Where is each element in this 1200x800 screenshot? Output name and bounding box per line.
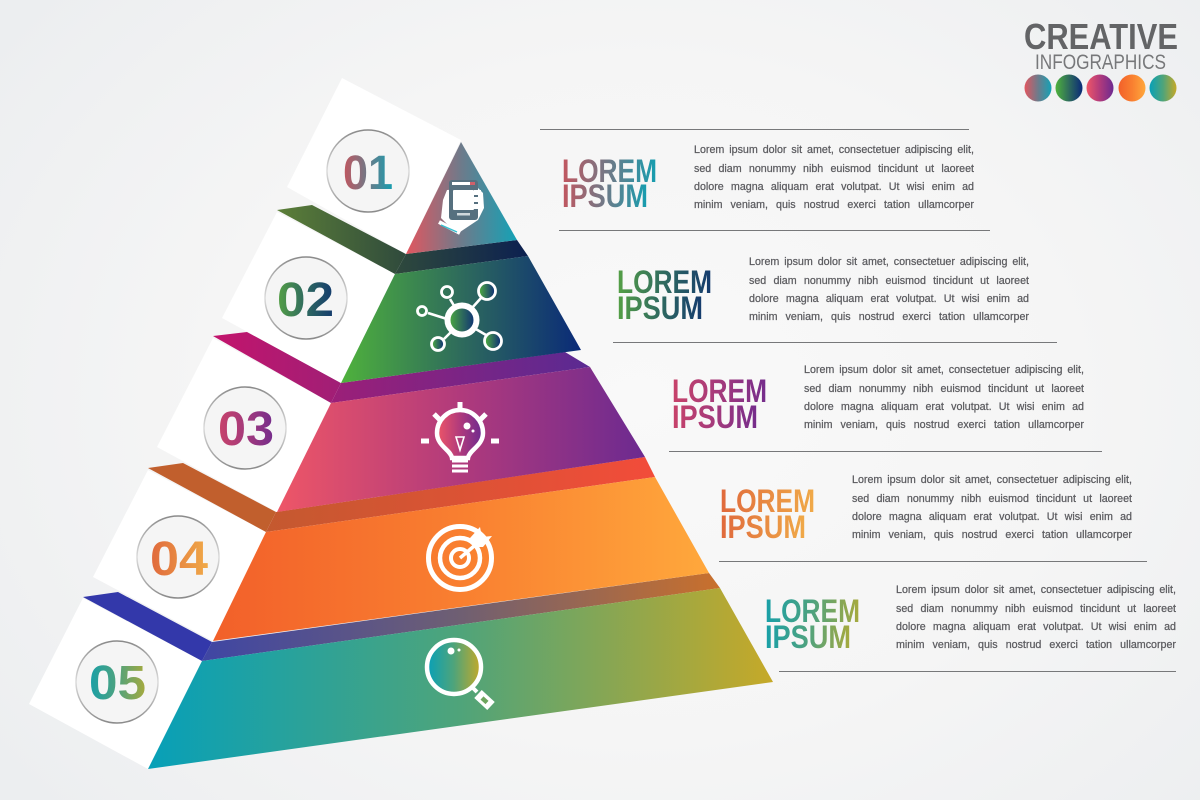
logo: Creative Infographics (1024, 16, 1178, 102)
heading 2: IPSUM (617, 290, 703, 326)
text block 3: dolore magna aliquam erat volutpat. Ut wisi enim ad (804, 401, 1084, 413)
text block 3: sed diam nonummy nibh euismod tincidunt ut laoreet (804, 383, 1084, 395)
text block 2: sed diam nonummy nibh euismod tincidunt ut laoreet (749, 275, 1029, 287)
text block 1: minim veniam, quis nostrud exerci tation ullamcorper (694, 199, 974, 211)
text block 2: minim veniam, quis nostrud exerci tation ullamcorper (749, 311, 1029, 323)
icon: hand holding phone (439, 180, 484, 233)
text block 4: Lorem ipsum dolor sit amet, consectetuer adipiscing elit, (852, 474, 1132, 486)
number badge 02: 02 (277, 274, 334, 327)
number badge 03: 03 (218, 403, 274, 456)
number badge 04: 04 (150, 533, 208, 586)
text block 1: Lorem ipsum dolor sit amet, consectetuer adipiscing elit, (694, 144, 974, 156)
text block 4 (852, 474, 1132, 541)
logo: Creative Infographics: CREATIVE (1024, 16, 1178, 57)
text block 2: Lorem ipsum dolor sit amet, consectetuer adipiscing elit, (749, 256, 1029, 268)
heading 4 (720, 483, 815, 545)
number badge 05 (76, 641, 158, 723)
text block 2: dolore magna aliquam erat volutpat. Ut wisi enim ad (749, 293, 1029, 305)
text block 2 (749, 256, 1029, 323)
logo: Creative Infographics: INFOGRAPHICS (1035, 51, 1166, 74)
icon: target with arrow (428, 526, 492, 590)
heading 2 (617, 264, 712, 326)
text block 3: minim veniam, quis nostrud exerci tation ullamcorper (804, 419, 1084, 431)
number badge 01 (327, 130, 409, 212)
tier 2 (222, 205, 581, 383)
text block 5: dolore magna aliquam erat volutpat. Ut wisi enim ad (896, 621, 1176, 633)
number badge 05: 05 (89, 657, 146, 710)
tier 1: top of pyramid (287, 78, 517, 254)
heading 5 (765, 593, 860, 655)
text block 4: dolore magna aliquam erat volutpat. Ut wisi enim ad (852, 511, 1132, 523)
heading 3: LOREM (672, 373, 767, 409)
heading 1: LOREM (562, 153, 657, 189)
text block 5: minim veniam, quis nostrud exerci tation ullamcorper (896, 639, 1176, 651)
text block 1: dolore magna aliquam erat volutpat. Ut wisi enim ad (694, 181, 974, 193)
icon: light bulb (421, 402, 499, 471)
number badge 01: 01 (343, 147, 393, 200)
text block 1: sed diam nonummy nibh euismod tincidunt ut laoreet (694, 163, 974, 175)
heading 4: IPSUM (720, 509, 806, 545)
icon: magnifier (427, 640, 491, 706)
text block 1 (694, 144, 974, 211)
heading 2: LOREM (617, 264, 712, 300)
text block 5: Lorem ipsum dolor sit amet, consectetuer adipiscing elit, (896, 584, 1176, 596)
heading 5: IPSUM (765, 619, 851, 655)
heading 3: IPSUM (672, 399, 758, 435)
number badge 02 (265, 257, 347, 339)
heading 3 (672, 373, 767, 435)
heading 5: LOREM (765, 593, 860, 629)
tier 3 (157, 332, 645, 512)
text block 5 (896, 584, 1176, 651)
text block 3: Lorem ipsum dolor sit amet, consectetuer adipiscing elit, (804, 364, 1084, 376)
number badge 03 (204, 387, 286, 469)
number badge 04 (137, 516, 219, 598)
tier 4 (93, 457, 709, 641)
tier 5: base of pyramid (29, 573, 773, 769)
heading 1 (562, 153, 657, 214)
text block 3 (804, 364, 1084, 431)
text block 5: sed diam nonummy nibh euismod tincidunt ut laoreet (896, 603, 1176, 615)
text block 4: minim veniam, quis nostrud exerci tation ullamcorper (852, 529, 1132, 541)
text block 4: sed diam nonummy nibh euismod tincidunt ut laoreet (852, 493, 1132, 505)
heading 4: LOREM (720, 483, 815, 519)
icon: network nodes (418, 282, 502, 350)
heading 1: IPSUM (562, 178, 648, 214)
